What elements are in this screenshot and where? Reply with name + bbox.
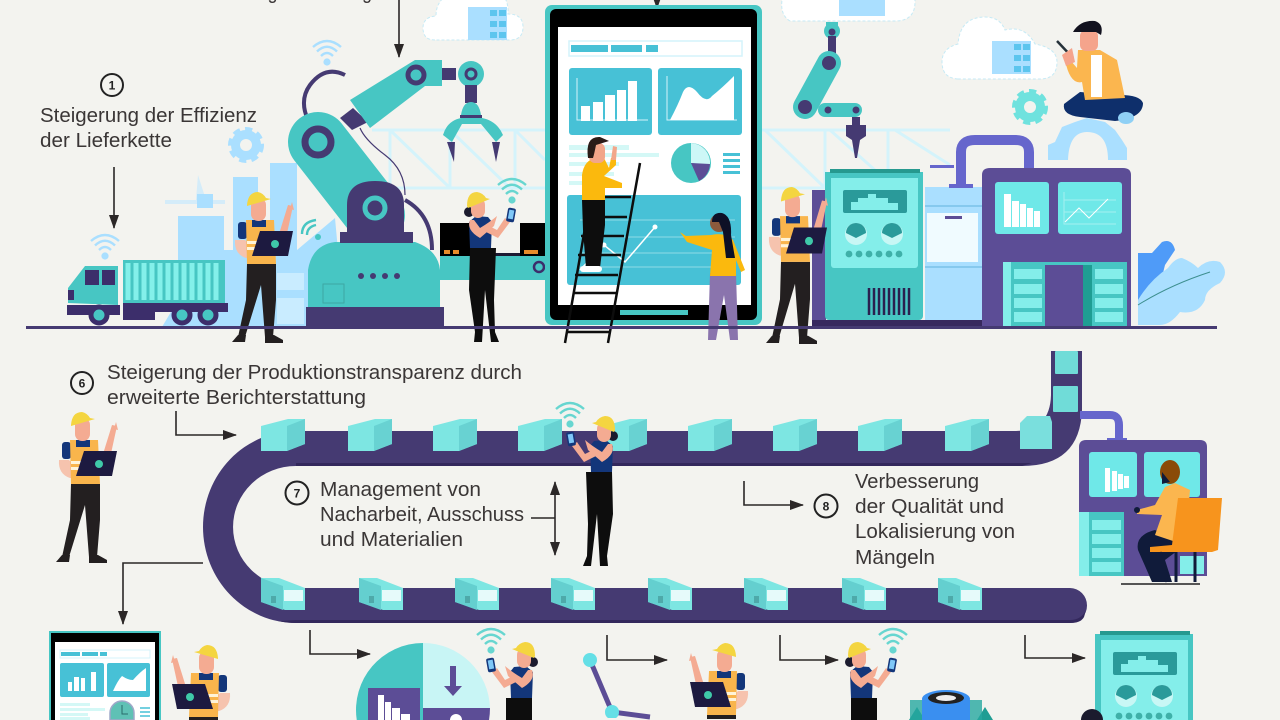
- arrow: to robot arm: [398, 0, 400, 57]
- text: step 6: Steigerung der Produktionstransparenz durch: [107, 362, 522, 384]
- text: step 1: Steigerung der Effizienz: [40, 105, 257, 127]
- operator person: [1138, 530, 1185, 582]
- arrow: down to small tablet: [123, 563, 203, 624]
- workstation pipe: [1080, 415, 1119, 440]
- building line chart panel: [1058, 182, 1122, 234]
- worker left lower: [56, 412, 118, 563]
- database: [909, 690, 993, 720]
- control machine: [825, 169, 923, 320]
- robot cables: [304, 72, 432, 250]
- step 8 number: [814, 494, 838, 518]
- purple building: [982, 168, 1131, 327]
- text: step 8: Lokalisierung von: [855, 521, 1015, 543]
- arrow: to tablet: [656, 0, 658, 8]
- text: step 7: [320, 479, 524, 551]
- woman lower 3: [845, 642, 897, 720]
- truss background: [372, 130, 950, 188]
- icon: teal gear: [1014, 92, 1046, 122]
- icon: wifi conveyor woman: [556, 403, 584, 428]
- arrow: to woman 3: [780, 635, 838, 660]
- text: step 7: Nacharbeit, Ausschuss: [320, 504, 524, 526]
- tablet bar chart: [569, 68, 652, 135]
- control machine lower: [1095, 631, 1193, 720]
- icon: wifi robot: [313, 41, 341, 66]
- icon: wifi truck: [91, 235, 119, 260]
- building lower section: [1003, 262, 1127, 327]
- woman with phone top: [464, 192, 516, 342]
- leaves: [1138, 241, 1225, 325]
- arrow: to worker: [607, 635, 667, 660]
- text: step 6: [107, 362, 522, 409]
- tablet bottom chart: [567, 195, 741, 285]
- man on ladder: [580, 137, 622, 272]
- truck cab: [68, 266, 118, 305]
- building bar chart panel: [995, 182, 1049, 234]
- truck chassis: [67, 303, 228, 320]
- step 6 number: [71, 372, 93, 394]
- text: step 8: der Qualität und: [855, 496, 1004, 518]
- worker right of tablet: [766, 187, 828, 344]
- woman on conveyor: [566, 416, 618, 566]
- operator workstation: [1079, 415, 1222, 585]
- purple pipe: [930, 140, 1029, 188]
- text: step 1: [40, 105, 257, 152]
- sitting man: [1057, 21, 1143, 124]
- icon: wifi woman: [498, 179, 526, 204]
- bottom row boxes: [261, 578, 982, 610]
- tablet large: [545, 5, 762, 325]
- tablet legend: [723, 153, 740, 174]
- icon: gear light blue: [230, 130, 262, 160]
- second robot arm: [798, 22, 866, 158]
- tablet frame: [545, 5, 762, 325]
- blue column: [925, 187, 982, 320]
- step 1 number: [101, 74, 123, 96]
- arrow: to pie: [310, 630, 370, 654]
- small tablet: [49, 631, 161, 720]
- step 6 number: 6: [79, 376, 86, 390]
- person head lower: [1081, 709, 1103, 720]
- text: step 8: [855, 471, 1015, 569]
- robot lower arm: [318, 142, 375, 215]
- robot arm: [304, 60, 503, 327]
- tablet area chart: [658, 68, 742, 135]
- tablet text lines: [569, 145, 659, 185]
- network nodes: [583, 653, 650, 718]
- worker lower 2: [689, 643, 748, 719]
- arrow: double headed: [531, 482, 555, 555]
- step 8 number: 8: [823, 500, 830, 514]
- tablet pie chart: [671, 143, 711, 183]
- text: step 7: und Materialien: [320, 529, 463, 551]
- step 1 number: 1: [109, 78, 116, 92]
- step 7 number: [286, 482, 308, 504]
- text: step 6: erweiterte Berichterstattung: [107, 387, 366, 409]
- truck container: [123, 260, 225, 303]
- icon: wifi small near worker: [302, 220, 321, 240]
- cloud centre top: [782, 0, 915, 21]
- arrow: to step 8: [744, 481, 803, 505]
- text: step 8: Mängeln: [855, 547, 935, 569]
- arrow: step 6: [176, 411, 236, 435]
- worker lower left: [171, 645, 230, 720]
- workstation body: [1079, 440, 1207, 576]
- barcode vents: [869, 288, 909, 315]
- truck wheels: [91, 307, 216, 323]
- top row cubes: [261, 351, 1078, 451]
- text: step 1: der Lieferkette: [40, 130, 172, 152]
- text: step 8: Verbesserung: [855, 471, 979, 493]
- robot base: [308, 242, 440, 307]
- robot gripper: [465, 85, 477, 103]
- arrow: to truck: [113, 167, 115, 228]
- ladder: [565, 163, 640, 343]
- icon: large half gear: [1048, 118, 1127, 160]
- operator chair: [1150, 498, 1222, 552]
- icon: wifi woman 2: [477, 629, 505, 654]
- cloud left: [423, 0, 523, 40]
- woman pointing: [680, 213, 745, 340]
- factory skyline: [162, 163, 345, 327]
- conveyor behind workers: [440, 223, 546, 280]
- machine support: [812, 190, 982, 327]
- worker left top: [232, 192, 294, 343]
- cloud right: [942, 17, 1057, 79]
- tablet header bar: [569, 41, 742, 56]
- truck: [67, 260, 228, 323]
- arrow: to machine: [1025, 635, 1085, 658]
- conveyor belt: [203, 351, 1087, 623]
- text: step 7: Management von: [320, 479, 481, 501]
- robot upper arm: [350, 60, 442, 128]
- woman lower 2: [486, 642, 538, 720]
- robot joint: [340, 232, 413, 243]
- step 7 number: 7: [294, 486, 301, 500]
- ground line: [26, 326, 1217, 329]
- icon: wifi woman 3: [879, 629, 907, 654]
- pie chart large: [356, 643, 490, 720]
